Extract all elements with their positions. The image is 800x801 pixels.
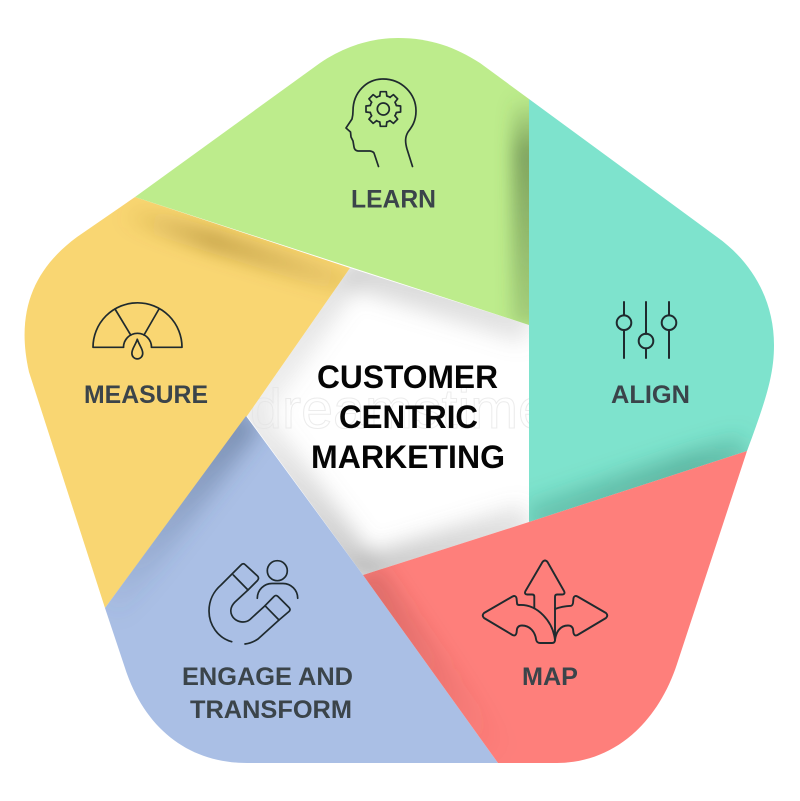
title: customer centric marketing bbox=[311, 359, 505, 475]
panel: measure bbox=[25, 197, 350, 608]
icon: magnet with person bbox=[209, 561, 298, 644]
label: engage and transform bbox=[182, 663, 353, 724]
icon: sliders bbox=[617, 302, 676, 358]
watermark: dreamstime bbox=[250, 377, 550, 440]
label: learn: LEARN bbox=[351, 186, 436, 214]
label: engage and transform: ENGAGE AND bbox=[182, 663, 353, 691]
panel: map bbox=[363, 451, 747, 763]
label: align: ALIGN bbox=[611, 381, 690, 409]
icon: three-way arrows bbox=[483, 560, 607, 643]
panel: centre bbox=[247, 268, 529, 575]
icon: head with gear bbox=[346, 79, 416, 166]
title: customer centric marketing: MARKETING bbox=[311, 439, 505, 475]
panel: align bbox=[529, 99, 774, 522]
title: customer centric marketing: CUSTOMER bbox=[317, 359, 498, 395]
title: customer centric marketing: CENTRIC bbox=[339, 399, 478, 435]
panel: engage and transform bbox=[105, 416, 498, 763]
label: measure: MEASURE bbox=[84, 381, 208, 409]
icon: gauge bbox=[93, 303, 182, 359]
panel: learn bbox=[135, 38, 529, 325]
label: map: MAP bbox=[522, 663, 578, 691]
label: engage and transform: TRANSFORM bbox=[190, 696, 352, 724]
